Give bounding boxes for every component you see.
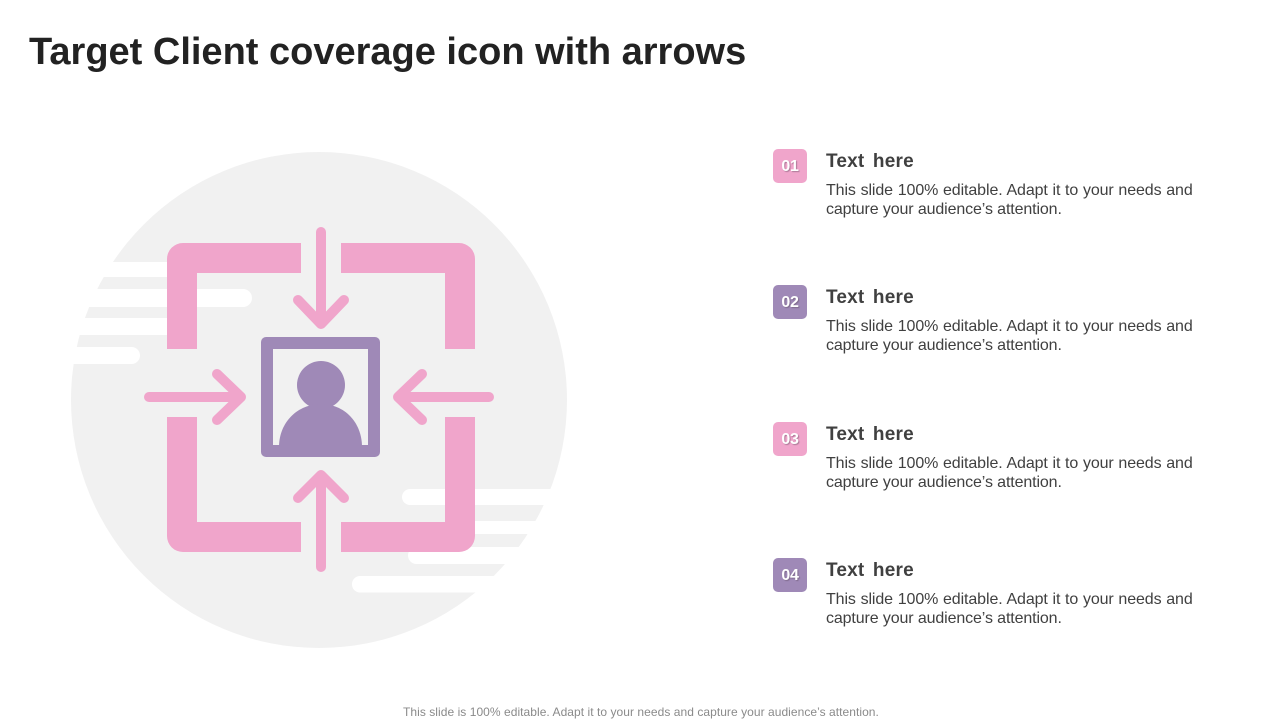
description 01: This slide 100% editable. Adapt it to your needs and	[826, 182, 1193, 199]
item 01	[773, 149, 1193, 218]
description 03: This slide 100% editable. Adapt it to your needs and	[826, 455, 1193, 472]
pink bracket frame	[167, 243, 475, 552]
item 04	[773, 558, 1193, 627]
background circle with white streaks	[40, 152, 592, 648]
badge 01: 01	[781, 158, 799, 175]
icon: client portrait	[261, 337, 380, 457]
description 04: This slide 100% editable. Adapt it to your needs and	[826, 591, 1193, 608]
heading 01: Text here	[826, 151, 914, 172]
badge 03	[773, 422, 807, 456]
badge 04: 04	[781, 567, 799, 584]
heading 04: Text here	[826, 560, 914, 581]
footer note: This slide is 100% editable. Adapt it to your needs and capture your audience’s attention.	[403, 705, 879, 719]
heading 02: Text here	[826, 287, 914, 308]
title: Target Client coverage icon with arrows	[29, 31, 746, 73]
badge 01	[773, 149, 807, 183]
badge 03: 03	[781, 431, 799, 448]
badge 02	[773, 285, 807, 319]
badge 02: 02	[781, 294, 799, 311]
item 02	[773, 285, 1193, 354]
description 03	[826, 455, 1193, 491]
description 02	[826, 318, 1193, 354]
heading 03: Text here	[826, 424, 914, 445]
description 02: This slide 100% editable. Adapt it to your needs and	[826, 318, 1193, 335]
badge 04	[773, 558, 807, 592]
item 03	[773, 422, 1193, 491]
description 02: capture your audience’s attention.	[826, 337, 1062, 354]
description 03: capture your audience’s attention.	[826, 474, 1062, 491]
description 04	[826, 591, 1193, 627]
arrows pointing inward	[149, 232, 489, 567]
description 01: capture your audience’s attention.	[826, 201, 1062, 218]
description 04: capture your audience’s attention.	[826, 610, 1062, 627]
description 01	[826, 182, 1193, 218]
